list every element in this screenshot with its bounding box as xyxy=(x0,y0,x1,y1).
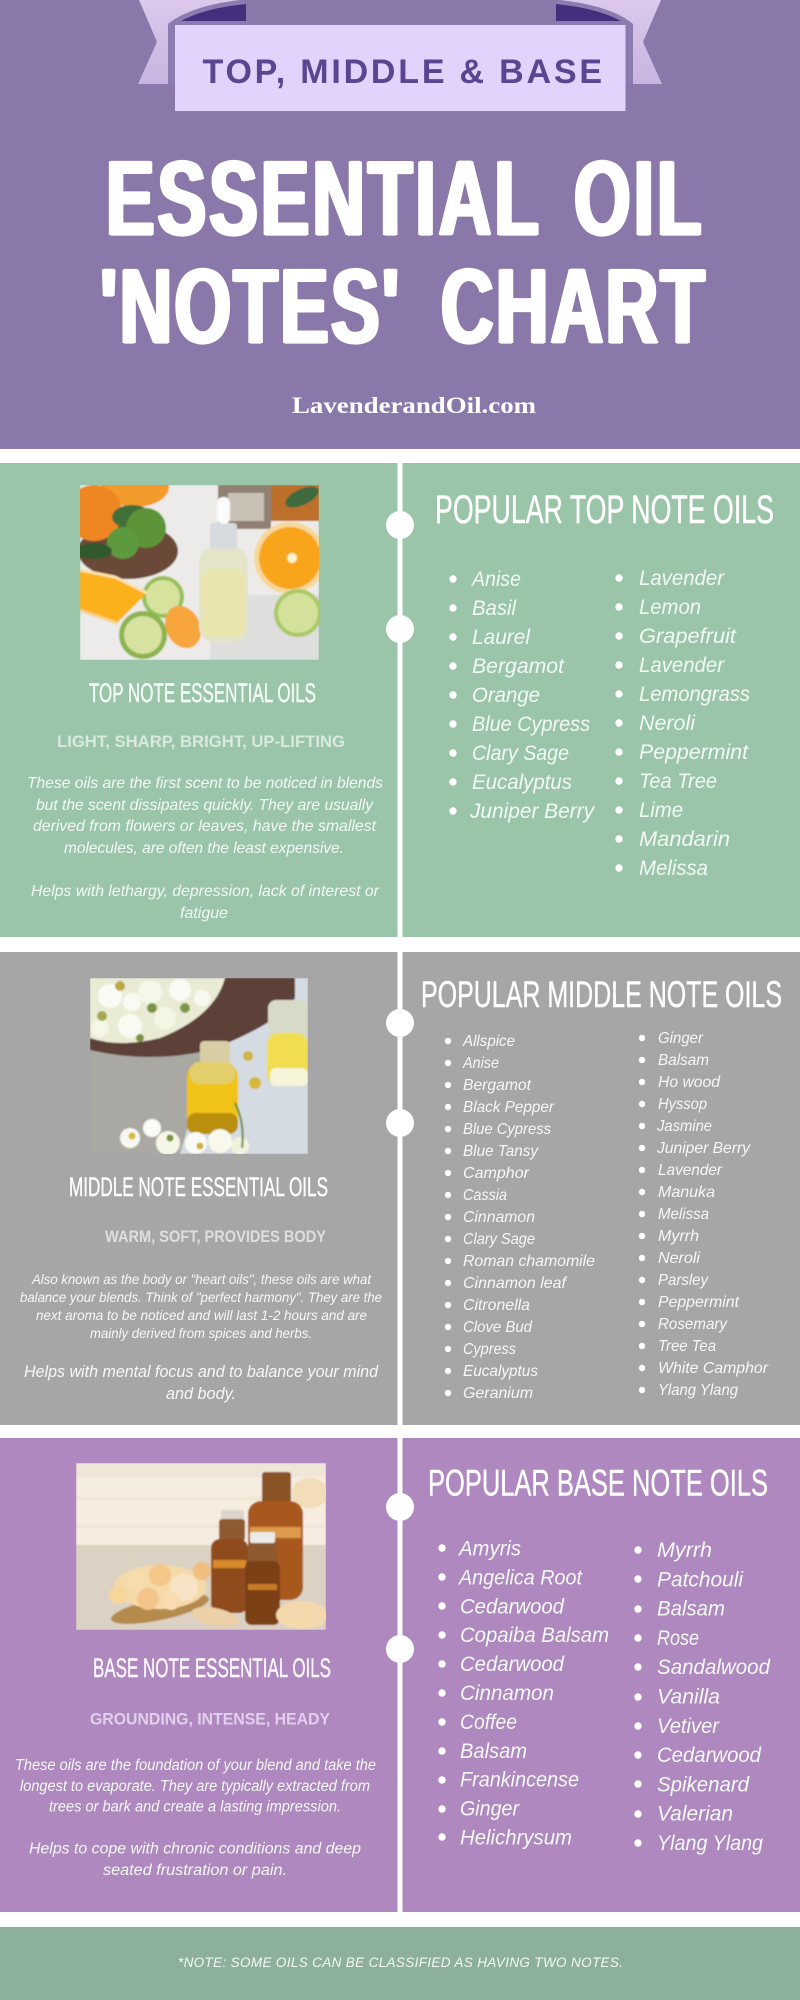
list: base note oils column 2: Balsam xyxy=(657,1597,725,1621)
list: middle note oils column 2: Hyssop xyxy=(658,1096,707,1113)
list: base note oils column 2: Vanilla xyxy=(657,1684,720,1708)
list: top note oils column 2: Tea Tree xyxy=(639,769,717,793)
list: top note oils column 1: Basil xyxy=(472,596,517,620)
list: middle note oils column 2: Lavender xyxy=(658,1162,723,1179)
description xyxy=(20,1271,382,1403)
description: These oils are the first scent to be noticed in blends xyxy=(27,775,383,792)
description: derived from flowers or leaves, have the smallest xyxy=(33,818,377,835)
list: base note oils column 1: Copaiba Balsam xyxy=(460,1623,609,1647)
image: amber bottles and resin xyxy=(76,1463,326,1630)
list: middle note oils column 2: Jasmine xyxy=(656,1118,712,1135)
list: top note oils column 2: Neroli xyxy=(639,711,696,735)
description: molecules, are often the least expensive. xyxy=(64,840,344,857)
list: top note oils column 2: Peppermint xyxy=(639,740,749,764)
text: ESSENTIAL OIL xyxy=(106,138,704,258)
list: middle note oils column 2: White Camphor xyxy=(658,1360,769,1377)
list: base note oils column 1: Amyris xyxy=(457,1536,521,1560)
list: middle note oils column 2: Manuka xyxy=(658,1184,715,1201)
list: base note oils column 1: Angelica Root xyxy=(457,1565,583,1589)
list: middle note oils column 1: Eucalyptus xyxy=(463,1363,538,1380)
image: chamomile and oil bottles xyxy=(90,978,308,1154)
panel: header xyxy=(0,0,800,449)
list: middle note oils column 1: Geranium xyxy=(463,1385,533,1402)
list: base note oils column 1: Frankincense xyxy=(460,1768,579,1792)
title xyxy=(100,138,707,366)
list: base note oils column 1: Coffee xyxy=(460,1710,517,1734)
panel: footer note xyxy=(0,1927,800,2000)
list: middle note oils column 1: Clary Sage xyxy=(463,1231,535,1248)
list: middle note oils column 2: Melissa xyxy=(658,1206,709,1223)
list: top note oils column 2: Mandarin xyxy=(639,827,730,851)
keywords: LIGHT, SHARP, BRIGHT, UP-LIFTING xyxy=(57,733,345,751)
list: base note oils column 1: Cedarwood xyxy=(460,1652,565,1676)
list: base note oils column 2: Patchouli xyxy=(657,1567,744,1591)
list: base note oils column 2 xyxy=(634,1538,771,1855)
list: middle note oils column 1: Allspice xyxy=(462,1033,515,1050)
list: base note oils column 1: Balsam xyxy=(460,1739,527,1763)
list: middle note oils column 2: Ho wood xyxy=(658,1074,721,1091)
list: top note oils column 2 xyxy=(615,566,750,880)
list: middle note oils column 2: Balsam xyxy=(658,1052,709,1069)
description: but the scent dissipates quickly. They are usually xyxy=(36,797,374,814)
list: base note oils column 1: Ginger xyxy=(460,1797,520,1821)
footer text: *NOTE: SOME OILS CAN BE CLASSIFIED AS HAVING TWO NOTES. xyxy=(178,1955,623,1970)
list: base note oils column 2: Rose xyxy=(657,1626,699,1650)
list: top note oils column 1: Bergamot xyxy=(472,654,565,678)
timeline divider with dots xyxy=(386,463,414,1912)
list: top note oils column 2: Lemon xyxy=(639,595,701,619)
list: top note oils column 1: Eucalyptus xyxy=(472,770,572,794)
list: top note oils column 1: Clary Sage xyxy=(472,741,569,765)
list: base note oils column 2: Vetiver xyxy=(657,1714,720,1738)
text: 'NOTES' CHART xyxy=(100,246,707,366)
website: LavenderandOil.com xyxy=(292,393,536,418)
list: top note oils column 1: Blue Cypress xyxy=(472,712,590,736)
heading: base note essential oils: BASE NOTE ESSENTIAL OILS xyxy=(93,1653,331,1683)
list: top note oils column 2: Grapefruit xyxy=(639,624,737,648)
list: top note oils column 2: Lime xyxy=(639,798,683,822)
description: fatigue xyxy=(180,905,228,922)
list: top note oils column 2: Lavender xyxy=(639,653,725,677)
panel: top note xyxy=(0,463,800,937)
list: middle note oils column 2 xyxy=(639,1030,769,1399)
description: Also known as the body or "heart oils", these oils are what xyxy=(31,1271,372,1287)
list: middle note oils column 1: Anise xyxy=(462,1055,499,1072)
list: middle note oils column 1: Bergamot xyxy=(463,1077,532,1094)
description: These oils are the foundation of your blend and take the xyxy=(15,1757,376,1774)
list: base note oils column 1: Helichrysum xyxy=(460,1826,572,1850)
list: middle note oils column 1: Cinnamon xyxy=(463,1209,535,1226)
list: middle note oils column 1: Cinnamon leaf xyxy=(463,1275,568,1292)
list: middle note oils column 2: Juniper Berry xyxy=(656,1140,751,1157)
description: trees or bark and create a lasting impression. xyxy=(49,1798,341,1816)
list: top note oils column 1: Laurel xyxy=(472,625,531,649)
list: base note oils column 2: Cedarwood xyxy=(657,1743,762,1767)
description: next aroma to be noticed and will last 1-2 hours and are xyxy=(36,1307,367,1323)
list: top note oils column 1: Anise xyxy=(470,567,521,591)
list: base note oils column 2: Sandalwood xyxy=(657,1655,771,1679)
keywords: WARM, SOFT, PROVIDES BODY xyxy=(105,1227,327,1246)
description xyxy=(15,1757,376,1879)
description: Helps with lethargy, depression, lack of interest or xyxy=(31,883,380,900)
list: base note oils column 2: Myrrh xyxy=(657,1538,712,1562)
ribbon text: TOP, MIDDLE & BASE xyxy=(202,53,602,91)
heading: top note essential oils: TOP NOTE ESSENTIAL OILS xyxy=(89,678,316,708)
list: middle note oils column 1: Roman chamomile xyxy=(463,1253,595,1270)
list: base note oils column 1 xyxy=(438,1536,609,1850)
list: middle note oils column 2: Neroli xyxy=(658,1250,700,1267)
list: top note oils column 1: Orange xyxy=(472,683,540,707)
list: base note oils column 2: Ylang Ylang xyxy=(657,1831,763,1855)
description: balance your blends. Think of "perfect harmony". They are the xyxy=(20,1289,382,1305)
list: middle note oils column 1: Camphor xyxy=(463,1165,530,1182)
list: middle note oils column 1: Citronella xyxy=(463,1297,530,1314)
list: middle note oils column 1: Blue Tansy xyxy=(463,1143,539,1160)
list: top note oils column 1 xyxy=(449,567,595,823)
list: middle note oils column 2: Ginger xyxy=(658,1030,704,1047)
list: top note oils column 2: Melissa xyxy=(639,856,708,880)
list: base note oils column 2: Valerian xyxy=(657,1802,733,1826)
description: longest to evaporate. They are typically extracted from xyxy=(20,1778,370,1795)
description: and body. xyxy=(166,1385,236,1403)
description: Helps to cope with chronic conditions and deep xyxy=(29,1840,361,1858)
list: middle note oils column 1: Cassia xyxy=(463,1187,507,1204)
list: base note oils column 1: Cedarwood xyxy=(460,1594,565,1618)
heading: middle note essential oils: MIDDLE NOTE ESSENTIAL OILS xyxy=(69,1172,328,1202)
image: citrus and oil bottle xyxy=(80,485,319,660)
list: middle note oils column 1 xyxy=(445,1033,595,1402)
description: mainly derived from spices and herbs. xyxy=(90,1325,312,1341)
panel: base note xyxy=(0,1438,800,1912)
list: middle note oils column 2: Ylang Ylang xyxy=(658,1382,738,1399)
list: middle note oils column 1: Clove Bud xyxy=(463,1319,533,1336)
keywords: GROUNDING, INTENSE, HEADY xyxy=(90,1710,331,1728)
description: seated frustration or pain. xyxy=(103,1862,287,1879)
list: top note oils column 1: Juniper Berry xyxy=(469,799,595,823)
list: base note oils column 1: Cinnamon xyxy=(460,1681,554,1705)
list: base note oils column 2: Spikenard xyxy=(657,1772,750,1796)
panel: middle note xyxy=(0,952,800,1425)
list: top note oils column 2: Lavender xyxy=(639,566,725,590)
list: middle note oils column 1: Black Pepper xyxy=(463,1099,555,1116)
list: middle note oils column 2: Peppermint xyxy=(658,1294,740,1311)
list: middle note oils column 2: Rosemary xyxy=(658,1316,728,1333)
list: middle note oils column 1: Blue Cypress xyxy=(463,1121,551,1138)
description xyxy=(27,775,383,922)
list: middle note oils column 2: Myrrh xyxy=(658,1228,699,1245)
description: Helps with mental focus and to balance your mind xyxy=(24,1363,379,1381)
ribbon banner xyxy=(138,0,662,111)
list: middle note oils column 2: Parsley xyxy=(658,1272,709,1289)
list: middle note oils column 2: Tree Tea xyxy=(658,1338,716,1355)
list: middle note oils column 1: Cypress xyxy=(463,1341,516,1358)
list: top note oils column 2: Lemongrass xyxy=(639,682,750,706)
